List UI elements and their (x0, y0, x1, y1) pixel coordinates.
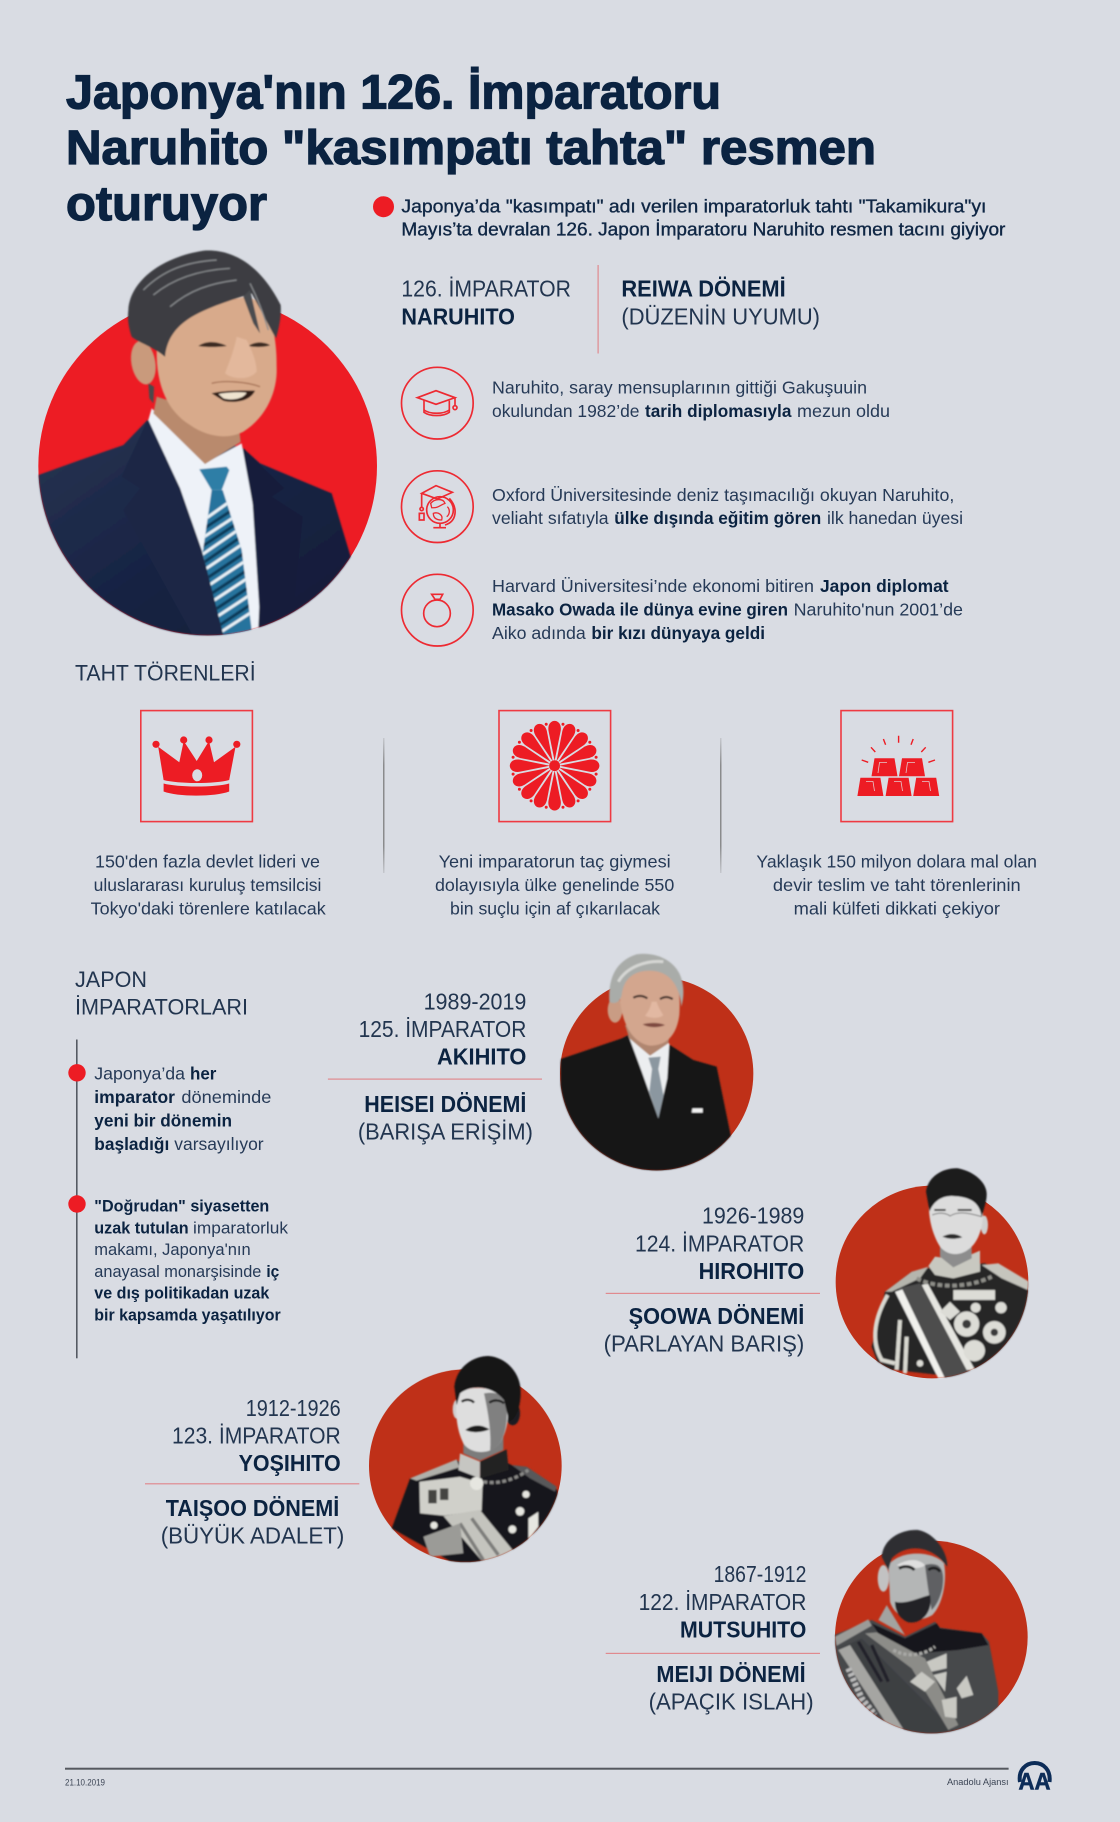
intro text with red bullet (373, 196, 1005, 240)
era panel: Naruhito and Reiwa (401, 265, 820, 354)
note: politics (68, 1195, 289, 1324)
emperor text: Mutsuhito: MEIJI DÖNEMİ (656, 1661, 806, 1687)
fact: graduation cap: okulundan 1982’de (492, 401, 640, 421)
emperor text: Yoshihito: TAIŞOO DÖNEMİ (166, 1495, 339, 1521)
note: politics: makamı, Japonya'nın (94, 1241, 251, 1259)
emperor text: Akihito: 125. İMPARATOR (359, 1016, 526, 1042)
icon: gold bars (841, 711, 953, 822)
emperor text: Hirohito: 124. İMPARATOR (635, 1230, 804, 1256)
ceremony: gold bars (756, 711, 1037, 918)
ceremony: crown (91, 711, 326, 918)
emperor text: Hirohito (604, 1203, 820, 1356)
fact: Harvard and marriage (401, 574, 963, 646)
note: politics: uzak tutulan (94, 1220, 189, 1238)
ceremony: gold bars: Yaklaşık 150 milyon dolara mal olan (756, 851, 1037, 871)
fact: graduation cap: mezun oldu (797, 401, 890, 421)
ceremony: crown: 150'den fazla devlet lideri ve (95, 851, 320, 871)
era panel: Naruhito and Reiwa: (DÜZENİN UYUMU) (621, 304, 820, 330)
emperor text: Mutsuhito: (APAÇIK ISLAH) (649, 1689, 814, 1715)
note: new era: Japonya’da (94, 1064, 185, 1084)
note: politics: imparatorluk (193, 1220, 289, 1238)
note: new era: imparator (94, 1087, 175, 1107)
logo: Anadolu Ajansı: AA (1018, 1768, 1050, 1795)
ceremony: gold bars: mali külfeti dikkati çekiyor (794, 898, 1000, 918)
note: politics: "Doğrudan" siyasetten (94, 1198, 269, 1216)
note: politics: bir kapsamda yaşatılıyor (94, 1306, 281, 1324)
emperor text: Hirohito: HIROHITO (699, 1258, 804, 1284)
ceremony: crown: Tokyo'daki törenlere katılacak (91, 898, 326, 918)
fact: Harvard and marriage: Aiko adında (492, 623, 586, 643)
fact: Harvard and marriage: Masako Owada ile dünya evine giren (492, 599, 788, 619)
emperor text: Hirohito: 1926-1989 (702, 1203, 804, 1229)
title: oturuyor (66, 178, 267, 231)
title (66, 67, 876, 231)
emperor text: Yoshihito: (BÜYÜK ADALET) (161, 1523, 344, 1549)
fact: Harvard and marriage: bir kızı dünyaya geldi (591, 623, 765, 643)
icon: graduation cap (401, 367, 473, 439)
emperor text: Mutsuhito: MUTSUHITO (680, 1616, 806, 1642)
era panel: Naruhito and Reiwa: NARUHITO (401, 304, 515, 330)
timeline notes (68, 1040, 289, 1358)
footer: Anadolu Ajansı (947, 1777, 1009, 1788)
note: new era: yeni bir dönemin (94, 1110, 232, 1130)
emperor text: Mutsuhito: 1867-1912 (714, 1561, 806, 1587)
emperor text: Hirohito: (PARLAYAN BARIŞ) (604, 1330, 804, 1356)
emperor text: Akihito: HEISEI DÖNEMİ (364, 1091, 526, 1117)
fact: graduation cap: Naruhito, saray mensuplarının gittiği Gakuşuuin (492, 378, 867, 398)
era panel: Naruhito and Reiwa: REIWA DÖNEMİ (621, 276, 786, 302)
emperor text: Yoshihito: 1912-1926 (246, 1395, 341, 1421)
emperor text: Hirohito: ŞOOWA DÖNEMİ (629, 1303, 804, 1329)
emperor text: Yoshihito (145, 1395, 359, 1549)
note: politics: iç (266, 1263, 279, 1281)
portrait: Yoshihito (369, 1356, 562, 1567)
portrait: Naruhito (38, 250, 377, 643)
fact: Oxford: Oxford Üniversitesinde deniz taşımacılığı okuyan Naruhito, (492, 485, 954, 505)
icon: globe and cap (401, 471, 473, 542)
heading: Japanese emperors: JAPON (75, 967, 147, 992)
emperor text: Yoshihito: 123. İMPARATOR (172, 1423, 341, 1449)
note: new era: varsayılıyor (174, 1134, 264, 1154)
emperor text: Akihito: AKIHITO (437, 1044, 526, 1070)
ceremony: gold bars: devir teslim ve taht törenlerinin (773, 875, 1021, 895)
fact: Harvard and marriage: Harvard Üniversitesi’nde ekonomi bitiren (492, 576, 814, 596)
icon: imperial chrysanthemum (499, 711, 611, 822)
portrait: Hirohito (836, 1168, 1029, 1380)
ceremony: chrysanthemum: dolayısıyla ülke genelinde 550 (435, 875, 675, 895)
emperor text: Mutsuhito (606, 1561, 820, 1715)
fact: Harvard and marriage: Japon diplomat (820, 576, 949, 596)
title: Naruhito "kasımpatı tahta" resmen (66, 122, 876, 175)
portrait: Mutsuhito (834, 1530, 1028, 1738)
ceremony: chrysanthemum: Yeni imparatorun taç giymesi (439, 851, 671, 871)
fact: Oxford: ilk hanedan üyesi (827, 508, 963, 528)
note: new era (68, 1064, 271, 1154)
intro text with red bullet: Mayıs’ta devralan 126. Japon İmparatoru Naruhito resmen tacını giyiyor (401, 220, 1005, 240)
ceremony: chrysanthemum (435, 711, 675, 918)
ceremony: crown: uluslararası kuruluş temsilcisi (94, 875, 321, 895)
fact: graduation cap: tarih diplomasıyla (645, 401, 792, 421)
icon: ring (401, 574, 473, 646)
note: new era: döneminde (181, 1087, 271, 1107)
fact: Oxford: ülke dışında eğitim gören (614, 508, 821, 528)
fact: Oxford (401, 471, 963, 542)
fact: graduation cap (401, 367, 890, 439)
icon: crown (141, 711, 252, 822)
footer (65, 1763, 1050, 1795)
emperor text: Akihito (328, 988, 542, 1145)
heading: Japanese emperors (75, 967, 248, 1020)
emperor text: Mutsuhito: 122. İMPARATOR (639, 1589, 806, 1615)
emperor text: Akihito: 1989-2019 (424, 988, 526, 1014)
intro text with red bullet: Japonya’da "kasımpatı" adı verilen imparatorluk tahtı "Takamikura"yı (401, 196, 986, 216)
title: Japonya'nın 126. İmparatoru (66, 67, 721, 120)
heading: Japanese emperors: İMPARATORLARI (75, 995, 248, 1020)
portrait: Akihito (560, 954, 753, 1178)
note: politics: ve dış politikadan uzak (94, 1285, 270, 1303)
note: new era: başladığı (94, 1134, 169, 1154)
note: politics: anayasal monarşisinde (94, 1263, 261, 1281)
emperor text: Yoshihito: YOŞIHITO (239, 1450, 341, 1476)
emperor text: Akihito: (BARIŞA ERİŞİM) (358, 1119, 533, 1145)
note: new era: her (190, 1064, 217, 1084)
fact: Oxford: veliaht sıfatıyla (492, 508, 609, 528)
fact: Harvard and marriage: Naruhito'nun 2001’de (794, 599, 963, 619)
heading: throne ceremonies: TAHT TÖRENLERİ (75, 660, 256, 685)
era panel: Naruhito and Reiwa: 126. İMPARATOR (401, 276, 571, 302)
footer: 21.10.2019 (65, 1778, 105, 1789)
ceremony: chrysanthemum: bin suçlu için af çıkarılacak (450, 898, 660, 918)
